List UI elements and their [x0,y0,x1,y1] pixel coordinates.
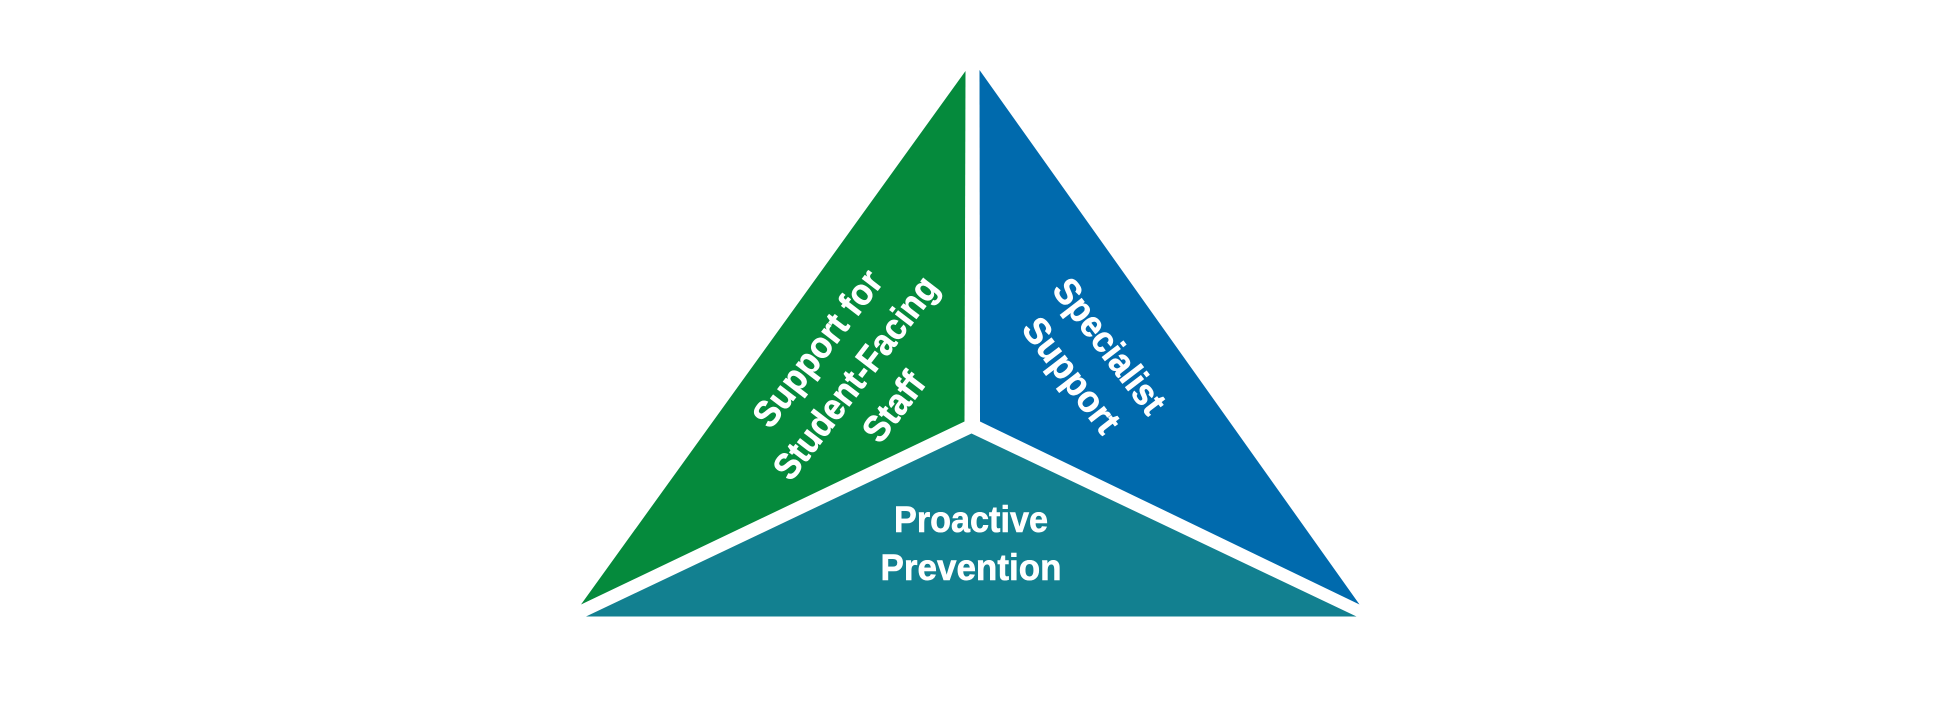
label: proactive prevention [880,499,1062,588]
label: support for student-facing staff: Student-Facing [765,268,946,487]
label: support for student-facing staff: Staff [854,363,934,450]
label: support for student-facing staff [727,239,985,517]
label: specialist support: Support [1014,309,1129,441]
panel: support for student-facing staff [581,71,985,604]
label: specialist support: Specialist [1044,270,1174,422]
label: support for student-facing staff: Support for [744,262,891,435]
panel: specialist support [980,70,1360,604]
label: proactive prevention: Prevention [880,547,1062,588]
panel: proactive prevention [586,434,1356,616]
label: specialist support [1006,270,1174,451]
label: proactive prevention: Proactive [894,499,1048,540]
